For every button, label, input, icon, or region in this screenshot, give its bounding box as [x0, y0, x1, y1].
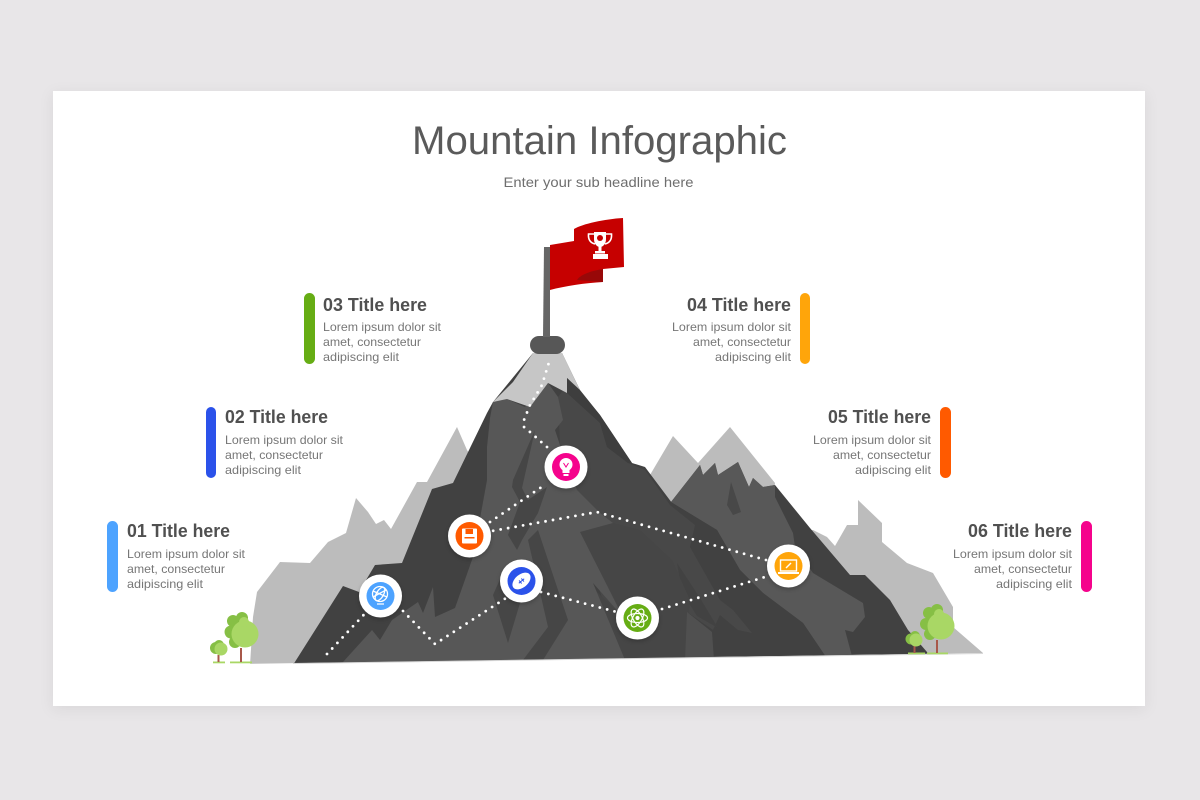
description: adipiscing elit	[127, 577, 204, 591]
accent bar	[107, 521, 118, 592]
icon: save	[462, 528, 477, 544]
icon: atom	[628, 607, 648, 629]
subtitle: Enter your sub headline here	[504, 174, 694, 190]
big tree foliage	[236, 612, 248, 624]
node 3: football	[500, 560, 543, 602]
icon: laptop	[778, 560, 799, 573]
right mountain mid face	[671, 462, 865, 660]
description: Lorem ipsum dolor sit	[323, 320, 442, 334]
base edge	[293, 653, 983, 664]
trunks	[914, 646, 916, 653]
description: Lorem ipsum dolor sit	[953, 547, 1073, 561]
heading: 02 Title here	[225, 406, 328, 427]
pole base	[530, 336, 565, 354]
item 04	[672, 293, 810, 364]
description: amet, consectetur	[127, 562, 225, 576]
flag	[550, 218, 624, 290]
accent bar	[940, 407, 951, 478]
dark stripe	[523, 530, 568, 660]
description: adipiscing elit	[715, 350, 792, 364]
item 05	[813, 406, 951, 478]
main mountain mid-gray face	[343, 383, 625, 665]
dark crack	[508, 430, 547, 550]
summit snow cap	[493, 353, 580, 407]
right face lighter band	[558, 385, 752, 660]
node 5: laptop	[767, 544, 810, 588]
item 02	[206, 406, 344, 478]
item 06	[953, 520, 1092, 592]
heading: 01 Title here	[127, 520, 230, 541]
item 01	[107, 520, 246, 592]
summit dark corner	[567, 378, 632, 463]
heading: 05 Title here	[828, 406, 931, 427]
description: Lorem ipsum dolor sit	[813, 433, 932, 447]
heading: 06 Title here	[968, 520, 1072, 541]
main mountain dark body	[293, 353, 828, 665]
big tree foliage	[931, 604, 943, 616]
lower left of central face	[580, 523, 690, 660]
heading: 04 Title here	[687, 294, 791, 315]
description: amet, consectetur	[833, 448, 931, 462]
accent bar	[800, 293, 810, 364]
icon: trophy	[588, 232, 612, 259]
trees right	[906, 604, 954, 654]
trekking dotted route	[327, 359, 768, 654]
patch beside atom node	[685, 612, 714, 660]
small tree foliage	[906, 634, 916, 644]
panel: white card	[53, 91, 1145, 706]
description: amet, consectetur	[974, 562, 1072, 576]
back-right light mountain	[800, 500, 983, 660]
right mountain shadow crack	[727, 482, 741, 515]
right mountain dark body	[671, 462, 935, 660]
description: adipiscing elit	[323, 350, 400, 364]
node 4: atom	[616, 596, 659, 640]
description: amet, consectetur	[225, 448, 323, 462]
node 6: light bulb	[544, 446, 588, 488]
node 1: globe	[359, 574, 402, 618]
flag fold shadow	[577, 269, 603, 282]
item 03	[304, 293, 442, 364]
icon: rugby ball	[509, 569, 534, 593]
description: adipiscing elit	[225, 463, 302, 477]
trees left	[210, 612, 258, 663]
description: adipiscing elit	[996, 577, 1073, 591]
icon: bulb	[560, 458, 572, 476]
mountain illustration	[250, 353, 983, 665]
icon: globe	[372, 586, 388, 604]
dark small stripe	[493, 580, 520, 642]
description: amet, consectetur	[693, 335, 791, 349]
ground	[213, 662, 225, 663]
wedge in right face	[677, 563, 718, 628]
description: Lorem ipsum dolor sit	[127, 547, 246, 561]
title: Mountain Infographic	[412, 119, 787, 163]
right mountain snow peaks	[650, 427, 775, 502]
ground	[908, 652, 925, 654]
description: Lorem ipsum dolor sit	[225, 433, 344, 447]
accent bar	[1081, 521, 1092, 592]
pole	[543, 247, 550, 337]
heading: 03 Title here	[323, 294, 427, 315]
accent bar	[304, 293, 315, 364]
description: Lorem ipsum dolor sit	[672, 320, 792, 334]
description: amet, consectetur	[323, 335, 421, 349]
flag and pole	[530, 218, 624, 354]
trunks	[218, 655, 220, 662]
node 2: floppy disk	[448, 514, 491, 558]
description: adipiscing elit	[855, 463, 932, 477]
accent bar	[206, 407, 216, 478]
small tree foliage	[210, 642, 222, 654]
back-left light mountain	[250, 427, 480, 665]
